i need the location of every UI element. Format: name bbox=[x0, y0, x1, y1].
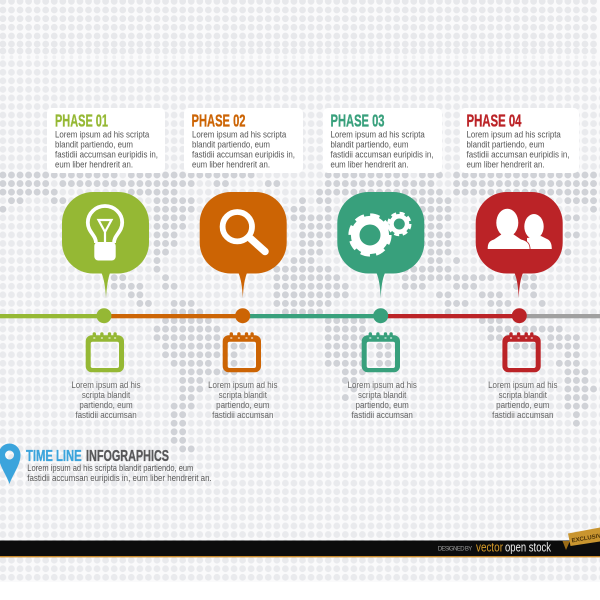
timeline bbox=[0, 308, 600, 323]
text block: milestone 2: scripta blandit bbox=[219, 390, 267, 400]
text block: phase 04: blandit partiendo, eum bbox=[466, 140, 544, 150]
text block: phase 02: fastidii accumsan euripidis in, bbox=[192, 150, 295, 160]
text block: phase 04: eum liber hendrerit an. bbox=[466, 160, 544, 170]
text block: phase 02 bbox=[192, 130, 295, 170]
text block: time line description: fastidii accumsan euripidis in, eum liber hendrerit an. bbox=[27, 473, 212, 483]
text block: milestone 1: Lorem ipsum ad his bbox=[71, 380, 141, 390]
panel: phase 03 text bbox=[323, 108, 442, 173]
text block: time line description bbox=[27, 463, 212, 483]
text block: phase 01: eum liber hendrerit an. bbox=[55, 160, 133, 170]
text block: milestone 4 bbox=[488, 380, 558, 420]
text block: milestone 3: scripta blandit bbox=[358, 390, 407, 400]
text block: phase 04 bbox=[466, 130, 570, 170]
panel: phase 04 text bbox=[460, 108, 579, 173]
footer credit bbox=[438, 539, 551, 554]
text block: phase 01: Lorem ipsum ad his scripta bbox=[55, 130, 149, 140]
icon: magnifier speech pin bbox=[200, 192, 287, 298]
text block: phase 01: fastidii accumsan euripidis in, bbox=[55, 150, 158, 160]
text block: milestone 3: partiendo, eum bbox=[356, 400, 409, 410]
text block: milestone 2: partiendo, eum bbox=[216, 400, 269, 410]
footer credit: DESIGNED BY bbox=[438, 546, 472, 552]
text block: milestone 1 bbox=[71, 380, 141, 420]
heading: time line infographics bbox=[26, 448, 169, 465]
heading: time line infographics: INFOGRAPHICS bbox=[86, 448, 169, 465]
icon: gears speech pin bbox=[337, 192, 424, 298]
text block: phase 03: Lorem ipsum ad his scripta bbox=[330, 130, 425, 140]
text block: phase 03: blandit partiendo, eum bbox=[330, 140, 408, 150]
text block: milestone 4: partiendo, eum bbox=[496, 400, 549, 410]
heading: time line infographics: TIME LINE bbox=[26, 448, 82, 465]
text block: time line description: Lorem ipsum ad his scripta blandit partiendo, eum bbox=[27, 463, 193, 473]
text block: milestone 3 bbox=[348, 380, 417, 420]
panel: phase 01 text bbox=[47, 108, 165, 173]
icon: calendar 4 bbox=[502, 334, 541, 372]
icon: calendar 2 bbox=[223, 334, 261, 372]
icon: location pin bbox=[0, 444, 20, 484]
text block: milestone 4: Lorem ipsum ad his bbox=[488, 380, 558, 390]
text block: phase 01 bbox=[55, 130, 158, 170]
text block: milestone 1: scripta blandit bbox=[82, 390, 131, 400]
text block: milestone 3: Lorem ipsum ad his bbox=[348, 380, 417, 390]
text block: milestone 1: partiendo, eum bbox=[79, 400, 133, 410]
footer credit: open stock bbox=[505, 539, 551, 554]
text block: milestone 2 bbox=[208, 380, 278, 420]
text block: milestone 3: fastidii accumsan bbox=[352, 410, 413, 420]
footer credit: vector bbox=[476, 539, 504, 554]
exclusive ribbon bbox=[562, 528, 600, 550]
heading: phase 03: PHASE 03 bbox=[330, 110, 385, 130]
text block: phase 02: blandit partiendo, eum bbox=[192, 140, 270, 150]
text block: phase 02: eum liber hendrerit an. bbox=[192, 160, 270, 170]
text block: phase 02: Lorem ipsum ad his scripta bbox=[192, 130, 286, 140]
text block: milestone 4: fastidii accumsan bbox=[492, 410, 554, 420]
icon: calendar 1 bbox=[86, 334, 124, 372]
text block: milestone 2: fastidii accumsan bbox=[212, 410, 274, 420]
icon: lightbulb speech pin bbox=[62, 192, 149, 298]
text block: phase 03: fastidii accumsan euripidis in, bbox=[330, 150, 434, 160]
text block: phase 01: blandit partiendo, eum bbox=[55, 140, 133, 150]
text block: phase 04: Lorem ipsum ad his scripta bbox=[466, 130, 561, 140]
panel: phase 02 text bbox=[184, 108, 303, 173]
world map dots bbox=[3, 175, 594, 449]
text block: milestone 2: Lorem ipsum ad his bbox=[208, 380, 278, 390]
heading: phase 02: PHASE 02 bbox=[192, 110, 246, 130]
text block: milestone 4: scripta blandit bbox=[499, 390, 547, 400]
heading: phase 04: PHASE 04 bbox=[466, 110, 522, 130]
heading: phase 01: PHASE 01 bbox=[55, 110, 108, 130]
text block: phase 04: fastidii accumsan euripidis in, bbox=[466, 150, 570, 160]
icon: people speech pin bbox=[476, 192, 563, 298]
text block: phase 03 bbox=[330, 130, 434, 170]
icon: calendar 3 bbox=[362, 334, 400, 372]
footer bar bbox=[0, 528, 600, 557]
text block: milestone 1: fastidii accumsan bbox=[75, 410, 137, 420]
text block: phase 03: eum liber hendrerit an. bbox=[330, 160, 408, 170]
